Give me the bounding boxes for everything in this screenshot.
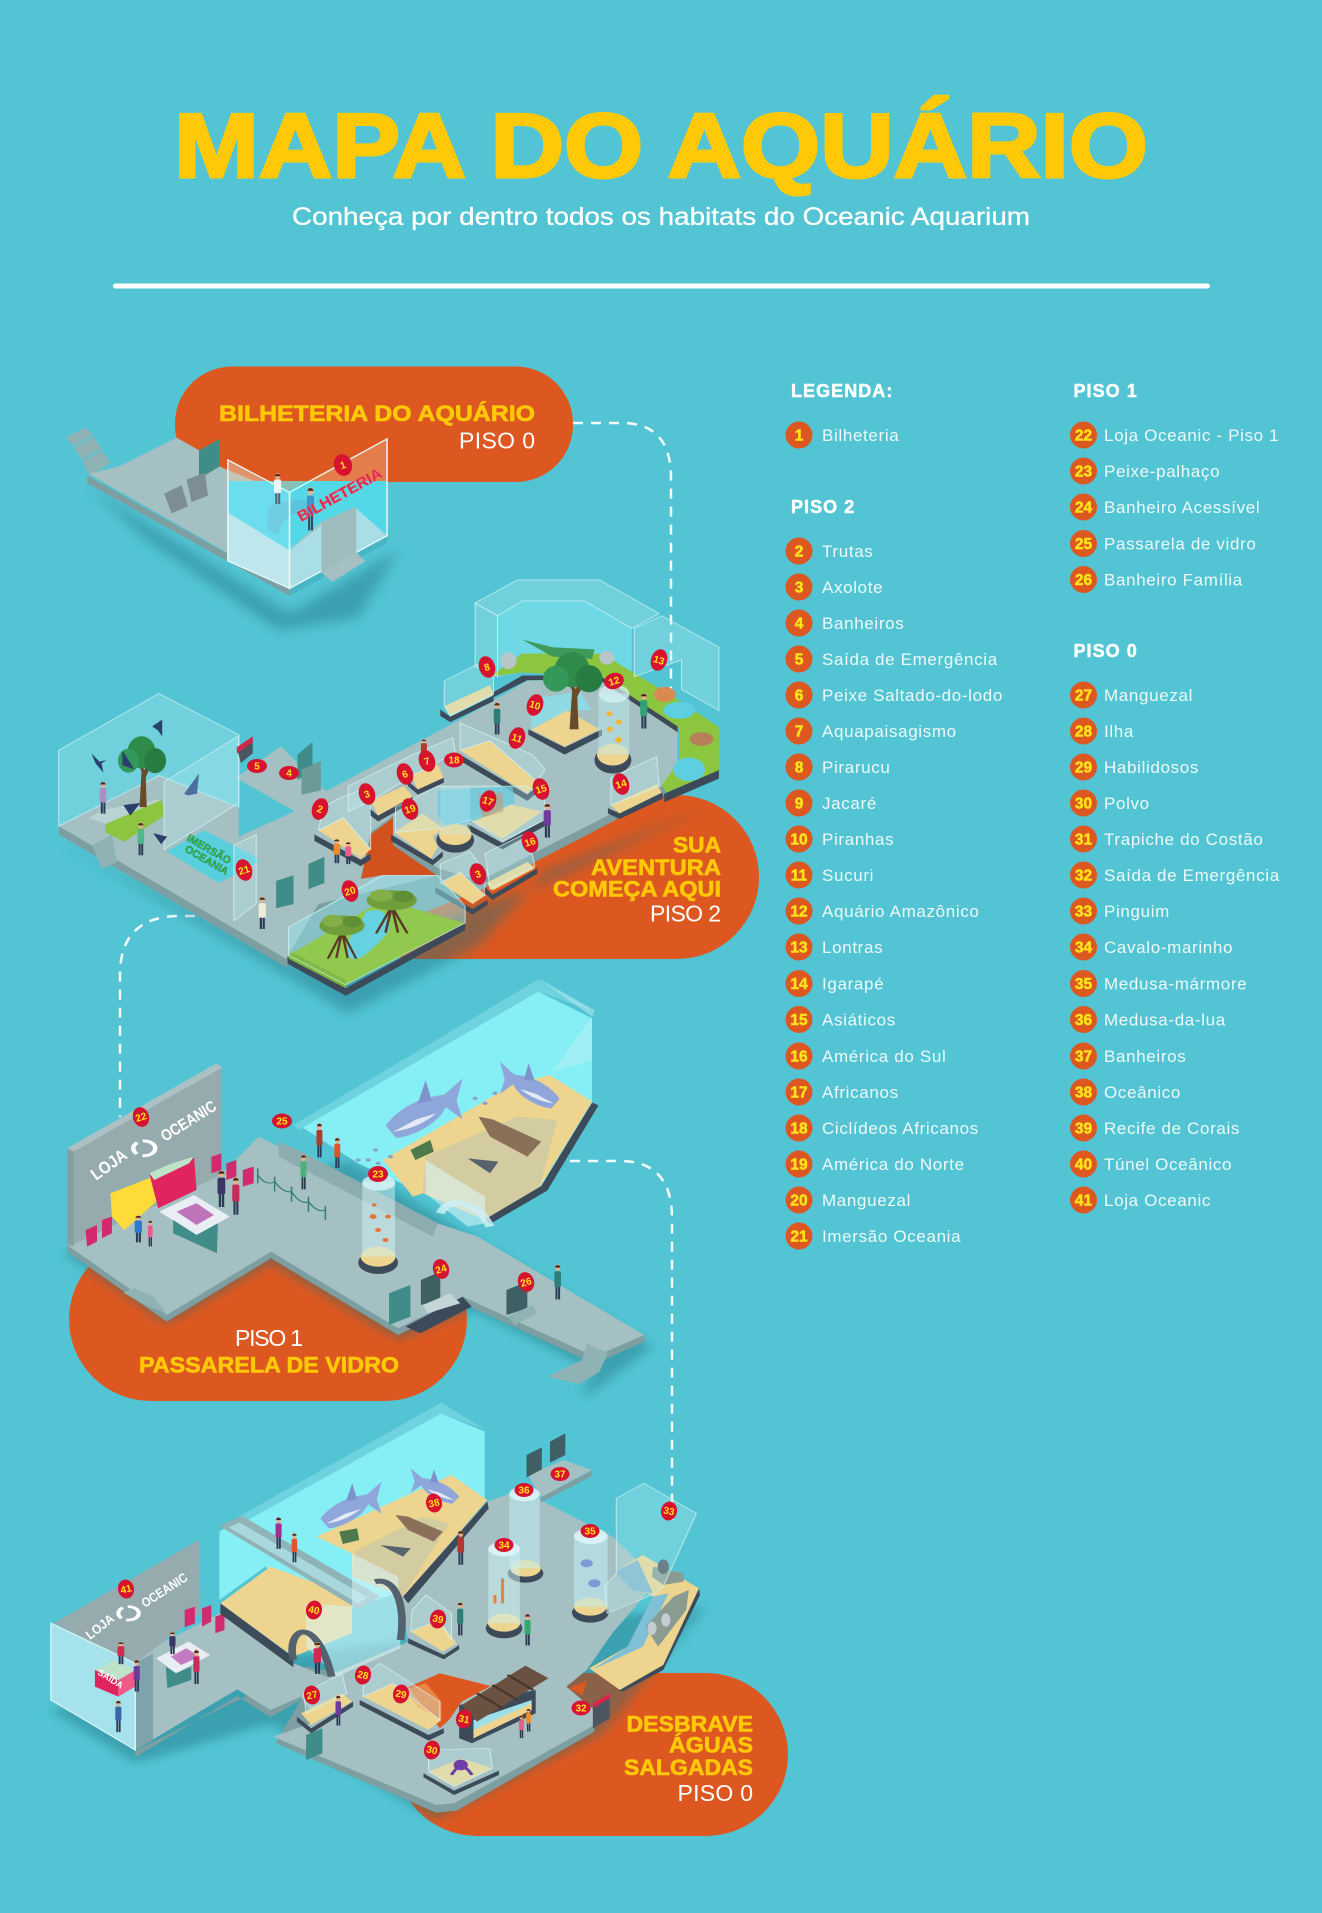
sharks <box>320 1482 382 1528</box>
map number badges: 10 <box>528 699 542 713</box>
imersao tree <box>118 736 166 807</box>
map number badges: 28 <box>356 1669 370 1683</box>
map number badges <box>116 452 679 1761</box>
map: piso 1 <box>65 978 652 1400</box>
pill text: piso 1: PISO 1 <box>235 1325 303 1351</box>
walkway low wall <box>279 1142 438 1237</box>
legend piso 0 items: 33 <box>1075 904 1092 920</box>
pale glass floor <box>228 513 290 588</box>
table <box>159 1195 230 1235</box>
legend piso 0 items: Polvo <box>1104 794 1150 813</box>
octopus tank 30 <box>423 1771 499 1795</box>
legend piso 2 items: 13 <box>790 940 808 956</box>
sign: imersao oceania: IMERSÃO <box>184 831 233 867</box>
family bathroom <box>506 1282 527 1315</box>
floor <box>89 438 386 588</box>
pill text: bilheteria <box>219 401 535 454</box>
legend piso 0 items: 29 <box>1075 760 1092 776</box>
legend piso 2 items: Manguezal <box>822 1191 911 1210</box>
orange cutout floor side <box>361 818 437 881</box>
stairs end <box>547 1343 608 1384</box>
lower tanks 27 <box>297 1702 353 1733</box>
map number badges: 22 <box>134 1111 149 1125</box>
accessible bathroom <box>389 1285 410 1325</box>
map number badges: 39 <box>431 1613 445 1627</box>
tank dark base <box>485 1103 598 1224</box>
glass tunnel <box>425 1160 485 1227</box>
legend piso 2 items: 10 <box>790 832 808 848</box>
legend piso 2 items: 6 <box>795 688 804 704</box>
map number badges: 7 <box>423 756 432 768</box>
legend piso 0 items: Pinguim <box>1104 902 1170 921</box>
map number badges: 38 <box>428 1497 441 1511</box>
pill text: piso 0: PISO 0 <box>678 1780 753 1806</box>
penguin enclosure <box>617 1588 700 1692</box>
legend piso 2 items: América do Sul <box>822 1047 946 1066</box>
map number badges: 33 <box>662 1505 676 1519</box>
map number badges: 8 <box>483 662 492 674</box>
immersive pool <box>167 830 259 883</box>
turnstiles <box>164 485 188 513</box>
map number badges: 19 <box>403 803 418 817</box>
saida box <box>95 1670 118 1697</box>
map number badges: 11 <box>510 732 524 746</box>
pill text: piso 2: SUA <box>673 832 721 858</box>
alligator <box>522 640 595 659</box>
legend piso 0 items: Medusa-mármore <box>1104 974 1247 994</box>
legend piso 1 items: Passarela de vidro <box>1104 534 1256 554</box>
tank sands <box>316 1475 487 1597</box>
map number badges: 14 <box>614 778 629 792</box>
tank visitors <box>276 1517 282 1549</box>
fish 12 <box>606 711 622 743</box>
floor side <box>135 1667 594 1813</box>
sign: oceania: OCEANIA <box>182 843 231 878</box>
pill text: bilheteria: PISO 0 <box>459 428 535 454</box>
pill text: piso 0: DESBRAVE <box>626 1712 753 1736</box>
floor <box>51 1490 658 1805</box>
legend piso 2 items: Asiáticos <box>822 1010 896 1030</box>
pill: piso 2 <box>331 795 759 959</box>
tank 10 with tree <box>528 729 602 755</box>
heading: legenda: LEGENDA: <box>791 381 893 401</box>
upper right big tank <box>498 601 632 677</box>
map number badges: 40 <box>307 1604 321 1618</box>
tunnel <box>306 1553 401 1677</box>
dashed connectors <box>120 423 672 1520</box>
floor <box>59 677 678 959</box>
legend piso 0 items: 28 <box>1075 724 1092 740</box>
imersao green stage <box>105 799 164 842</box>
heading: piso 2: PISO 2 <box>791 497 855 517</box>
tunnel arches <box>292 1581 402 1677</box>
legend item 1: 1 <box>795 428 804 444</box>
legend piso 2 items: 17 <box>790 1084 808 1102</box>
sign: saida: SAÍDA <box>96 1667 125 1691</box>
legend piso 1 items <box>1070 422 1279 593</box>
clownfish cylinder <box>358 1251 398 1274</box>
legend piso 0 items: Habilidosos <box>1104 758 1199 777</box>
legend piso 0 items: 27 <box>1075 688 1092 704</box>
store wall <box>54 1540 201 1663</box>
map number badges: 3 <box>363 789 372 801</box>
central tanks 2-3-6-7 <box>314 835 371 866</box>
legend piso 2 items: Aquapaisagismo <box>822 722 957 741</box>
heading: piso 0: PISO 0 <box>1074 641 1138 661</box>
cylinder 12 <box>595 747 631 774</box>
big tank water <box>219 1413 485 1613</box>
map number badges: 34 <box>498 1540 510 1552</box>
legend piso 2 items: 3 <box>795 580 804 596</box>
map number badges: 13 <box>652 654 666 668</box>
legend piso 0 items: 31 <box>1075 832 1092 848</box>
legend piso 2 items: Piranhas <box>822 830 894 849</box>
map number badges: 30 <box>425 1744 439 1758</box>
map number badges: 32 <box>575 1704 587 1714</box>
visitor 15 <box>544 803 551 838</box>
big tank water <box>298 992 592 1220</box>
pill text: piso 2: COMEÇA AQUI <box>553 876 721 902</box>
legend piso 2 items: 16 <box>790 1048 808 1066</box>
legend item 1 <box>786 422 899 448</box>
map number badges: 26 <box>519 1276 534 1290</box>
legend piso 0 items: Oceânico <box>1104 1083 1181 1102</box>
legend piso 0 items: Cavalo-marinho <box>1104 938 1233 957</box>
legend piso 2 items: 7 <box>795 724 803 740</box>
restroom doors <box>298 742 312 780</box>
roofed tank 31 <box>459 1690 536 1743</box>
visitors 12 <box>640 693 647 729</box>
store logo <box>118 1607 139 1620</box>
sign: oceanic: OCEANIC <box>158 1098 220 1145</box>
tank 8 <box>444 685 494 716</box>
legend piso 1 items: 22 <box>1075 428 1092 444</box>
map number badges: 3 <box>474 869 483 881</box>
pill text: piso 2 <box>553 832 721 926</box>
map number badges: 18 <box>448 756 460 766</box>
legend piso 2 items: 19 <box>790 1156 808 1174</box>
legend piso 2 items: 9 <box>795 796 804 812</box>
legend piso 2 items: 20 <box>790 1192 808 1210</box>
legend item 1: Bilheteria <box>822 426 899 445</box>
restroom floor <box>541 1471 592 1503</box>
heading: piso 1: PISO 1 <box>1074 381 1138 401</box>
habitat dark trim <box>664 770 719 802</box>
legend piso 2 items: Igarapé <box>822 974 884 994</box>
legend piso 0 items <box>1070 682 1280 1214</box>
emergency exit <box>593 1698 610 1728</box>
legend piso 2 items: Sucuri <box>822 866 874 885</box>
legend piso 2 items: Peixe Saltado-do-lodo <box>822 686 1003 705</box>
map number badges: 27 <box>306 1689 319 1703</box>
pill: bilheteria <box>175 366 573 482</box>
pill text: piso 1 <box>139 1325 399 1378</box>
wreck and chest <box>395 1515 443 1542</box>
pond <box>663 702 695 719</box>
map number badges: 21 <box>237 864 252 878</box>
legend piso 2 items: 12 <box>790 904 808 920</box>
legend piso 0 items: 34 <box>1075 940 1092 956</box>
store visitors <box>135 1215 142 1242</box>
seahorse cylinder 34 <box>486 1618 522 1638</box>
legend piso 2 items: 14 <box>790 976 808 993</box>
floor <box>67 1137 644 1357</box>
water back wall <box>228 481 387 550</box>
mangrove base <box>288 923 465 996</box>
glass walkway <box>219 1516 380 1609</box>
pill text: piso 1: PASSARELA DE VIDRO <box>139 1352 399 1378</box>
map number badges: 35 <box>584 1526 596 1538</box>
map number badges: 16 <box>523 836 538 850</box>
legend <box>786 381 1280 1250</box>
tank 11 <box>460 755 537 801</box>
legend piso 2 items: 2 <box>795 544 803 560</box>
map number badges: 37 <box>554 1470 566 1480</box>
legend piso 2 items: Imersão Oceania <box>822 1227 961 1246</box>
treasure chest and wreck <box>410 1140 434 1160</box>
pill: piso 0 <box>395 1673 788 1836</box>
map: piso 2 <box>59 580 719 1013</box>
map number badges: 17 <box>481 795 495 809</box>
table <box>156 1642 210 1673</box>
legend piso 0 items: Banheiros <box>1104 1047 1186 1066</box>
legend piso 0 items: 38 <box>1075 1084 1092 1102</box>
legend piso 2 items: Jacaré <box>822 794 877 813</box>
legend piso 2 items: Pirarucu <box>822 758 891 777</box>
legend piso 0 items: Trapiche do Costão <box>1104 830 1263 849</box>
legend piso 2 items: 11 <box>791 868 808 884</box>
jelly cylinder 36 <box>508 1564 543 1583</box>
legend piso 2 items: Trutas <box>822 542 873 561</box>
walkway visitors <box>316 1123 322 1157</box>
legend piso 1 items: 26 <box>1075 572 1092 589</box>
map number badges: 23 <box>372 1170 384 1180</box>
legend piso 2 items: Axolote <box>822 578 883 597</box>
legend piso 1 items: 25 <box>1075 536 1092 553</box>
visitor 10 <box>494 702 500 735</box>
legend piso 2 items: 4 <box>795 616 804 632</box>
tank sand <box>383 1075 592 1220</box>
legend piso 2 items <box>786 538 1003 1250</box>
legend piso 1 items: Peixe-palhaço <box>1104 462 1220 481</box>
orange gap <box>408 1673 491 1728</box>
legend piso 0 items: 40 <box>1075 1156 1092 1174</box>
legend piso 1 items: 24 <box>1075 500 1092 516</box>
elevator door <box>199 439 220 479</box>
pill text: piso 0: SALGADAS <box>624 1755 753 1780</box>
stairs left <box>123 1288 167 1314</box>
glass: big tank and otters <box>475 580 659 628</box>
pill text: piso 0 <box>624 1712 753 1806</box>
legend piso 2 items: 15 <box>790 1012 808 1029</box>
subtitle: Conheça por dentro todos os habitats do Oceanic Aquarium <box>292 203 1030 231</box>
legend piso 1 items: Banheiro Acessível <box>1104 498 1260 517</box>
legend piso 2 items: Africanos <box>822 1083 899 1102</box>
door ramp <box>321 506 356 572</box>
central tanks 17-19 <box>391 835 443 865</box>
staff and visitor <box>274 473 281 504</box>
map number badges: 31 <box>457 1713 471 1727</box>
map number badges: 5 <box>254 762 260 772</box>
mangrove glass <box>289 875 465 985</box>
sharks <box>386 1078 463 1138</box>
legend piso 0 items: Túnel Oceânico <box>1104 1155 1232 1174</box>
map number badges: 24 <box>434 1263 449 1277</box>
title: MAPA DO AQUÁRIO <box>174 96 1148 197</box>
floor side <box>59 729 678 967</box>
birds <box>92 720 199 844</box>
legend piso 0 items: 41 <box>1075 1192 1092 1210</box>
legend piso 2 items: Ciclídeos Africanos <box>822 1119 979 1138</box>
imersao steps <box>92 835 117 869</box>
otter and rocks <box>654 687 676 702</box>
pill text: piso 2: AVENTURA <box>591 855 721 880</box>
legend piso 0 items: 37 <box>1075 1048 1092 1066</box>
jelly cylinder 35 <box>572 1603 609 1623</box>
legend piso 1 items: Loja Oceanic - Piso 1 <box>1104 426 1279 445</box>
legend piso 0 items: Manguezal <box>1104 686 1193 705</box>
map number badges: 12 <box>607 675 622 689</box>
legend piso 0 items: 39 <box>1075 1120 1092 1138</box>
legend piso 0 items: 35 <box>1075 976 1092 993</box>
ticket desk <box>268 499 313 536</box>
visitors 2 <box>334 839 340 863</box>
store visitors <box>118 1642 124 1664</box>
map number badges: 25 <box>276 1116 288 1128</box>
pill text: bilheteria: BILHETERIA DO AQUÁRIO <box>219 401 535 426</box>
legend piso 1 items: 23 <box>1075 464 1092 480</box>
map number badges: 29 <box>394 1688 408 1702</box>
legend piso 1 items: Banheiro Família <box>1104 570 1243 590</box>
legend piso 0 items: Recife de Corais <box>1104 1119 1240 1138</box>
legend piso 2 items: 8 <box>795 760 804 776</box>
legend piso 0 items: Medusa-da-lua <box>1104 1010 1226 1030</box>
legend piso 2 items: 18 <box>790 1120 808 1138</box>
fish school <box>356 1092 498 1165</box>
map: bilheteria floor <box>66 428 398 630</box>
floor side <box>67 1220 644 1364</box>
map number badges: 1 <box>339 460 348 472</box>
legend piso 2 items: 5 <box>795 652 804 668</box>
display stands <box>185 1605 224 1633</box>
tank 39 <box>408 1638 459 1659</box>
imersao visitors <box>100 781 106 814</box>
green habitat strip <box>490 654 719 792</box>
glass front <box>228 460 290 588</box>
store wall <box>69 1066 221 1247</box>
legend piso 0 items: Loja Oceanic <box>1104 1191 1211 1210</box>
legend piso 0 items: 32 <box>1075 868 1092 884</box>
map: piso 0 <box>51 1403 704 1820</box>
glass cube: imersao <box>59 694 239 826</box>
legend piso 2 items: 21 <box>790 1228 808 1246</box>
store glass <box>51 1623 135 1750</box>
legend piso 0 items: 36 <box>1075 1012 1092 1029</box>
legend piso 0 items: Saída de Emergência <box>1104 866 1280 885</box>
map number badges: 20 <box>343 885 358 899</box>
emergency exit sign <box>237 736 253 763</box>
person at door <box>259 897 266 929</box>
restroom doors <box>527 1447 542 1477</box>
legend piso 0 items: Ilha <box>1104 722 1134 741</box>
sign: loja piso 0: LOJA <box>83 1610 118 1642</box>
product shelves <box>110 1177 158 1230</box>
tank 3b and 16 <box>435 887 488 915</box>
lower tanks 28-29 <box>360 1700 444 1741</box>
legend piso 2 items: Banheiros <box>822 614 904 633</box>
legend piso 2 items: Aquário Amazônico <box>822 902 980 921</box>
stairs <box>66 428 110 476</box>
map number badges: 41 <box>120 1583 133 1597</box>
map number badges: 4 <box>286 768 292 780</box>
legend piso 0 items: 30 <box>1075 796 1092 812</box>
pill text: piso 0: ÁGUAS <box>669 1732 753 1758</box>
sign: bilheteria: BILHETERIA <box>295 465 385 525</box>
pill text: piso 2: PISO 2 <box>650 900 721 926</box>
tank 14 <box>608 792 663 819</box>
visitors 31 <box>519 1715 524 1738</box>
mangrove trees <box>319 915 365 959</box>
sign: oceanic piso 0: OCEANIC <box>138 1569 191 1611</box>
legend piso 2 items: Saída de Emergência <box>822 650 998 669</box>
legend piso 2 items: Lontras <box>822 938 883 957</box>
sign: loja: LOJA <box>87 1145 131 1184</box>
cylinder 18-base <box>436 827 474 853</box>
map number badges: 6 <box>401 769 410 781</box>
map number badges: 2 <box>315 804 324 816</box>
map number badges: 36 <box>518 1486 530 1496</box>
map number badges: 15 <box>534 783 549 797</box>
rope stanchions <box>258 1168 325 1220</box>
oceanic logo <box>133 1141 155 1156</box>
display stands <box>86 1153 254 1247</box>
legend piso 2 items: América do Norte <box>822 1155 965 1174</box>
pill: piso 1 <box>69 1238 467 1401</box>
